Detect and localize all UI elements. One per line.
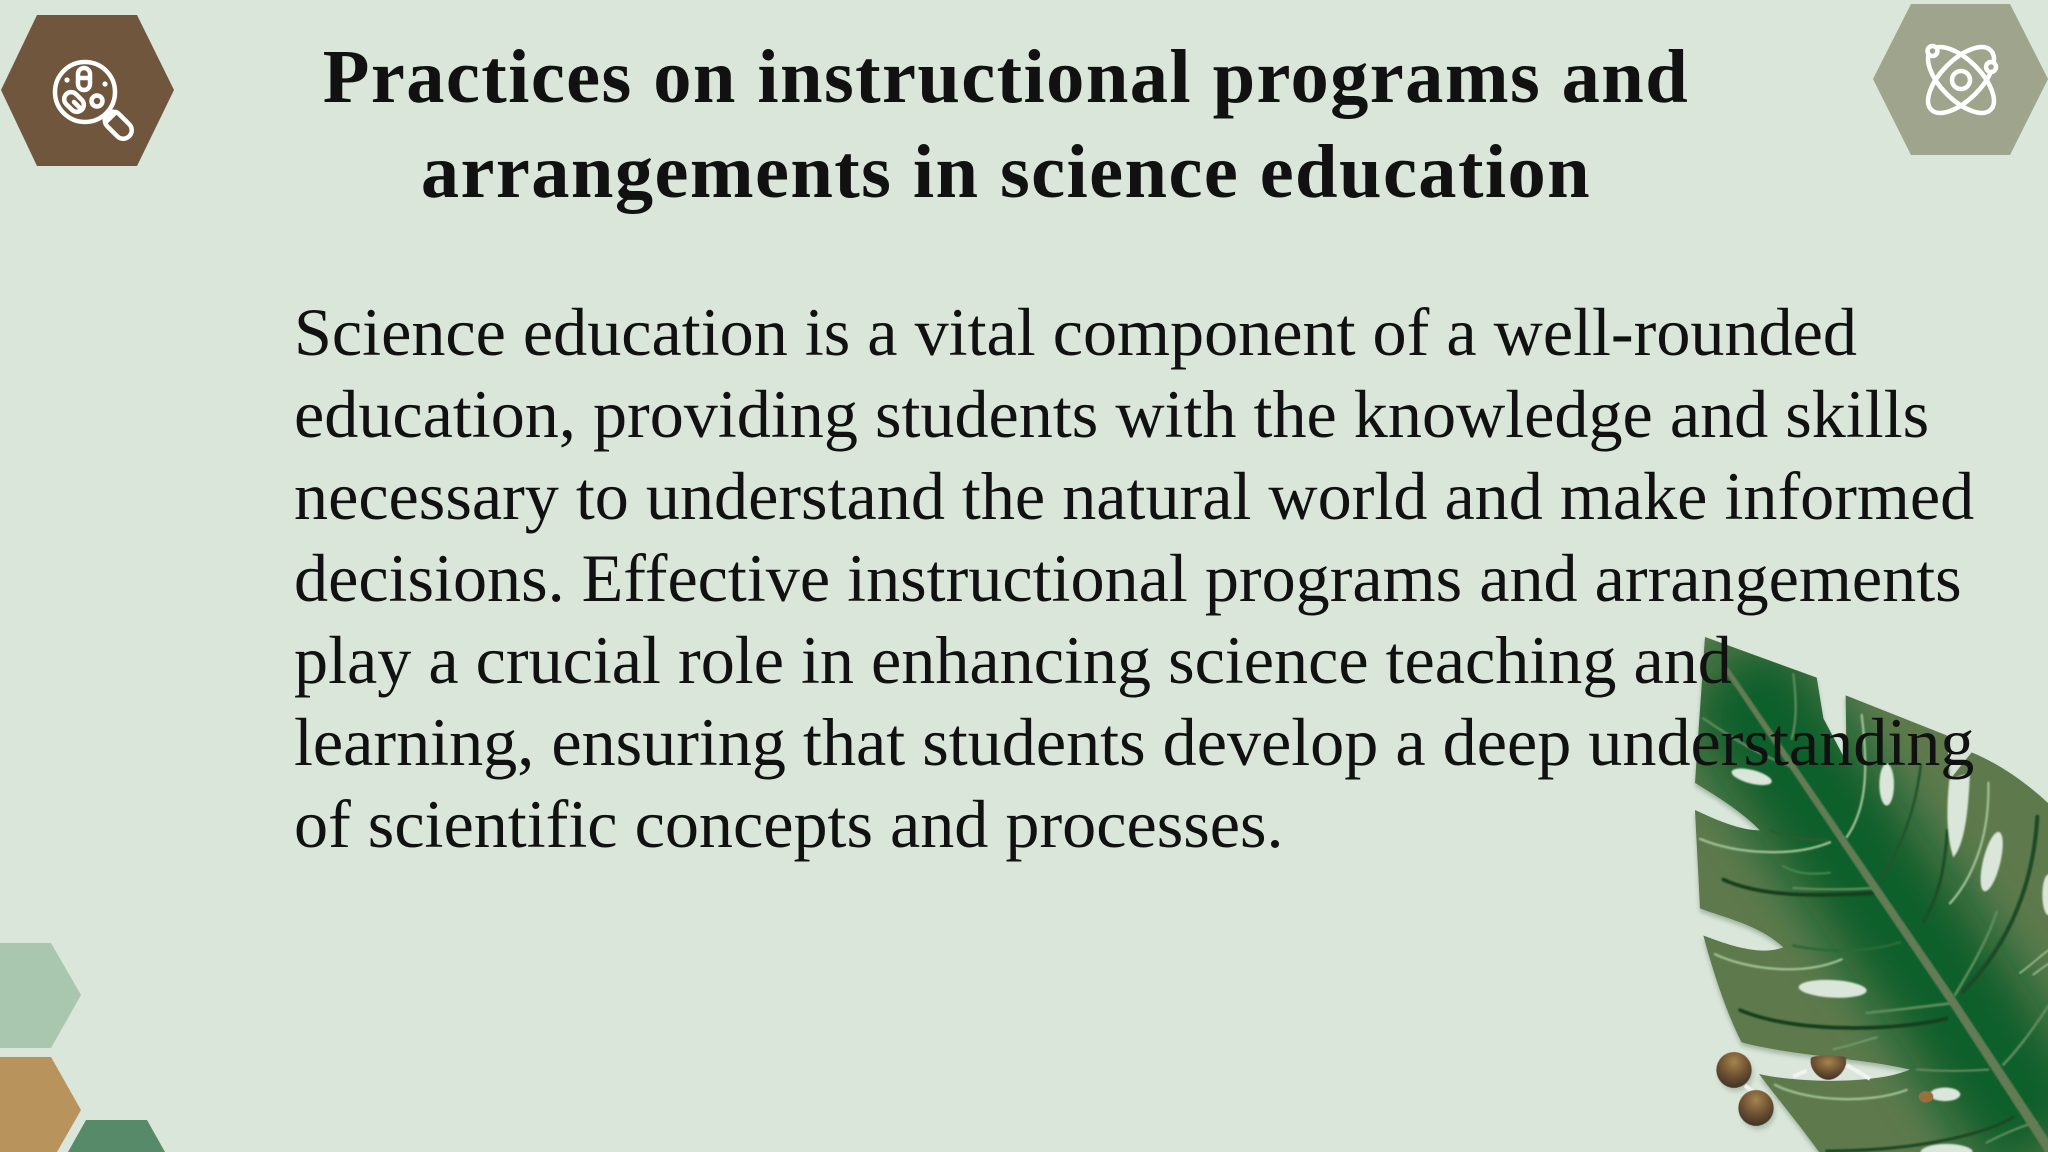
leaf illustration [1690, 630, 2048, 1152]
leaf dark centre shading [1697, 644, 2048, 1149]
hexagon: pale green [0, 943, 81, 1048]
seeds [1716, 1052, 1933, 1130]
body text block [294, 294, 1974, 862]
leaf holes [1730, 764, 2048, 1152]
icon: atom hexagon [1873, 4, 2048, 155]
body text block: decisions. Effective instructional programs and arrangements [294, 540, 1962, 616]
body text block: education, providing students with the knowledge and skills [294, 376, 1929, 452]
icon: magnifier hexagon [1, 15, 174, 166]
leaf veins [1700, 674, 2048, 1151]
leaf midrib [1724, 668, 2048, 1152]
title [323, 34, 1689, 214]
hexagon: green [68, 1120, 165, 1152]
body text block: play a crucial role in enhancing science teaching and [294, 622, 1732, 698]
body text block: of scientific concepts and processes. [294, 786, 1284, 862]
title: Practices on instructional programs and [323, 34, 1689, 119]
body text block: learning, ensuring that students develop a deep understanding [294, 704, 1974, 780]
title: arrangements in science education [421, 129, 1591, 214]
body text block: necessary to understand the natural world and make informed [294, 458, 1974, 534]
hexagon: tan [0, 1057, 81, 1152]
body text block: Science education is a vital component of a well-rounded [294, 294, 1857, 370]
